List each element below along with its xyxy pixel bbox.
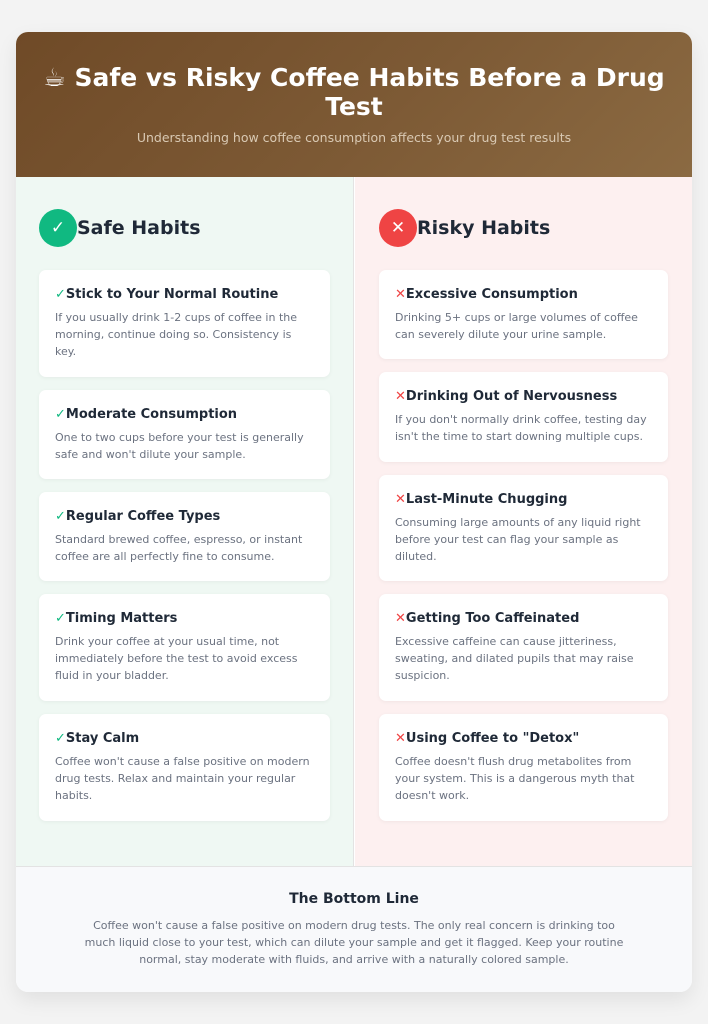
card: caffeinated: [379, 594, 668, 701]
card: detox: ✕Using Coffee to "Detox": [395, 731, 579, 746]
card: nervousness: [379, 372, 668, 462]
card: caffeinated: Excessive caffeine can cause jitteriness, sweating, and dilated pupils that may raise suspicion.: [395, 635, 634, 682]
card: detox: [379, 714, 668, 821]
card: regular types: ✓Regular Coffee Types: [55, 509, 220, 524]
panel: risky habits: [355, 177, 692, 866]
bottom text: Coffee won't cause a false positive on modern drug tests. The only real concern is drinking too much liquid close to your test, which can dilute your sample and get it flagged. Keep your routine normal, stay moderate with fluids, and arrive with a naturally colored sample.: [85, 919, 623, 966]
bottom heading: The Bottom Line: [289, 891, 419, 907]
subtitle: Understanding how coffee consumption affects your drug test results: [137, 130, 571, 145]
card: moderate: ✓Moderate Consumption: [55, 407, 237, 422]
card: stay calm: Coffee won't cause a false positive on modern drug tests. Relax and maintain your regular habits.: [55, 755, 310, 802]
bottom line section: [16, 866, 692, 992]
heading: safe habits: [39, 209, 200, 247]
card: moderate: [39, 390, 330, 479]
card: excessive: ✕Excessive Consumption: [395, 287, 578, 302]
card: detox: Coffee doesn't flush drug metabolites from your system. This is a dangerous myth that doesn't work.: [395, 755, 634, 802]
card: timing: ✓Timing Matters: [55, 611, 177, 626]
panel: safe habits: [16, 177, 354, 866]
card: chugging: [379, 475, 668, 581]
card: caffeinated: ✕Getting Too Caffeinated: [395, 611, 579, 626]
card: nervousness: ✕Drinking Out of Nervousness: [395, 389, 617, 404]
heading: risky habits: ✕: [391, 218, 405, 238]
card: regular types: [39, 492, 330, 581]
card: excessive: [379, 270, 668, 359]
card: timing: Drink your coffee at your usual time, not immediately before the test to avoid excess fluid in your bladder.: [55, 635, 297, 682]
card: normal routine: ✓Stick to Your Normal Routine: [55, 287, 278, 302]
card: moderate: One to two cups before your test is generally safe and won't dilute your sample.: [55, 431, 304, 461]
card: chugging: Consuming large amounts of any liquid right before your test can flag your sample as diluted.: [395, 516, 641, 563]
header: [16, 32, 692, 177]
card: nervousness: If you don't normally drink coffee, testing day isn't the time to start downing multiple cups.: [395, 413, 647, 443]
title: ☕ Safe vs Risky Coffee Habits Before a Drug Test: [43, 63, 665, 121]
card: normal routine: [39, 270, 330, 377]
card: stay calm: ✓Stay Calm: [55, 731, 139, 746]
heading: risky habits: Risky Habits: [417, 217, 550, 239]
card: chugging: ✕Last-Minute Chugging: [395, 492, 567, 507]
heading: safe habits: Safe Habits: [77, 217, 200, 239]
card: excessive: Drinking 5+ cups or large volumes of coffee can severely dilute your urine sample.: [395, 311, 638, 341]
card: normal routine: If you usually drink 1-2 cups of coffee in the morning, continue doing so. Consistency is key.: [55, 311, 297, 358]
heading: risky habits: [379, 209, 550, 247]
card: regular types: Standard brewed coffee, espresso, or instant coffee are all perfectly fine to consume.: [55, 533, 302, 563]
card: timing: [39, 594, 330, 701]
card: stay calm: [39, 714, 330, 821]
heading: safe habits: ✓: [51, 218, 65, 238]
